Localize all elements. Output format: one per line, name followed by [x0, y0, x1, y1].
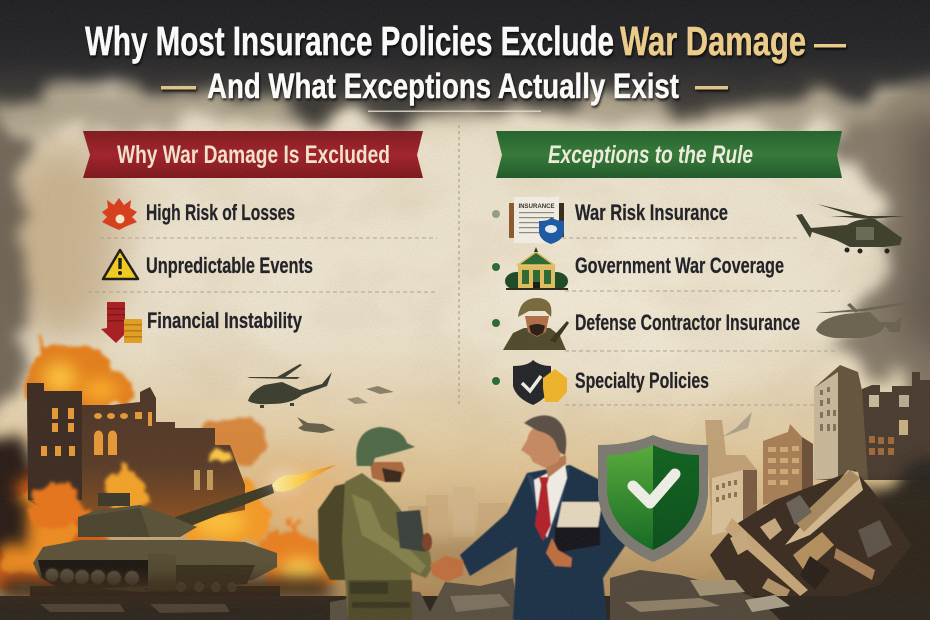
item: financial instability [101, 302, 302, 343]
upper cloud band [0, 85, 930, 128]
icon: black and gold shields [513, 360, 567, 405]
right buildings [705, 365, 930, 535]
soldier [318, 427, 432, 620]
title underline [368, 110, 541, 112]
bullet [492, 319, 500, 327]
title: Why Most Insurance Policies Exclude [85, 18, 614, 64]
jacket [342, 473, 432, 620]
item: government war coverage [492, 247, 784, 290]
front flames [30, 452, 232, 530]
right smoke [820, 90, 930, 420]
tank [30, 484, 280, 600]
helmet [356, 427, 415, 466]
face [521, 424, 562, 468]
title: And What Exceptions Actually Exist [207, 67, 679, 106]
left ribbon heading: Why War Damage Is Excluded [117, 141, 390, 169]
icon: government building [505, 247, 568, 290]
green check shield [598, 435, 708, 562]
right helicopter lower [815, 302, 908, 338]
soldier hand on gear [422, 533, 432, 551]
handshake [430, 556, 463, 582]
right helicopter top [796, 204, 905, 254]
bullet [492, 377, 500, 385]
chest gear [396, 510, 426, 552]
lapel shadow [527, 465, 570, 540]
folder [555, 527, 600, 553]
item: specialty policies [492, 360, 709, 405]
item: war risk insurance: War Risk Insurance [575, 200, 728, 225]
distant skyline [400, 487, 520, 580]
title [85, 18, 846, 106]
neck and face [370, 462, 405, 482]
businessman [430, 415, 627, 620]
icon: explosion [102, 198, 137, 230]
muzzle flash [269, 465, 336, 492]
left ribbon heading [83, 131, 423, 178]
backpack [318, 483, 350, 580]
icon: insurance document [509, 197, 564, 244]
back fire and haze [0, 342, 350, 592]
item: unpredictable events: Unpredictable Events [146, 253, 313, 278]
dark sky [0, 0, 930, 120]
neck [545, 455, 566, 478]
left helicopters [247, 364, 752, 437]
ground rubble [0, 570, 930, 620]
clipboard [557, 502, 602, 527]
right ribbon heading: Exceptions to the Rule [548, 141, 753, 169]
right rubble and dark smoke [710, 440, 930, 620]
item: financial instability: Financial Instability [147, 308, 302, 333]
suit [460, 465, 627, 620]
item: defense contractor insurance: Defense Contractor Insurance [575, 310, 800, 335]
title: War Damage [620, 18, 806, 64]
bullet [492, 263, 500, 271]
icon: falling coins [101, 302, 142, 343]
central dashed divider [458, 125, 460, 405]
right ribbon heading [496, 131, 842, 178]
hair [524, 415, 566, 455]
item: defense contractor insurance [492, 298, 800, 350]
item: unpredictable events [103, 250, 313, 279]
hand [546, 538, 572, 567]
item: high risk of losses: High Risk of Losses [146, 200, 295, 225]
bullet [492, 210, 500, 218]
item: specialty policies: Specialty Policies [575, 368, 709, 393]
left smoke [0, 90, 40, 470]
shirt [534, 463, 567, 538]
icon: insurance document: INSURANCE [518, 203, 555, 210]
row separators [88, 238, 840, 405]
burning building [27, 383, 245, 520]
item: government war coverage: Government War Coverage [575, 253, 784, 278]
icon: contractor soldier [503, 298, 569, 350]
icon: warning triangle [103, 250, 138, 279]
item: war risk insurance [492, 197, 728, 244]
tie [535, 477, 551, 541]
item: high risk of losses [102, 198, 295, 230]
